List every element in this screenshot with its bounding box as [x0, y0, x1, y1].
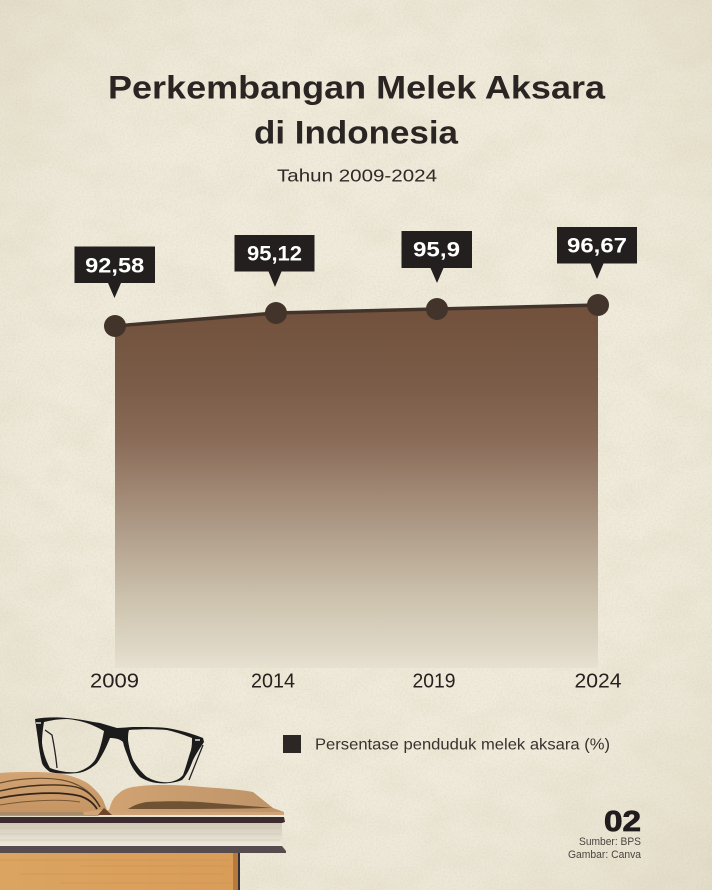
callout: 2024 value: [557, 227, 637, 279]
legend: Persentase penduduk melek aksara (%): [315, 736, 610, 754]
x-axis labels: 2014: [251, 670, 295, 692]
icon: glasses: [35, 717, 204, 783]
title: [108, 70, 605, 150]
open book right leaves: [83, 785, 284, 815]
callout: 2009 value: 92,58: [85, 254, 145, 278]
callout: 2019 value: [402, 231, 472, 283]
page number and credits: Sumber: BPS: [579, 836, 641, 848]
glasses frame: [35, 717, 204, 783]
x-axis labels: 2019: [412, 670, 456, 692]
callout: 2024 value: 96,67: [567, 234, 627, 258]
glasses temples: [45, 730, 203, 780]
callout: 2009 value: [74, 246, 155, 298]
trend line: [115, 305, 598, 326]
area chart: [104, 294, 609, 668]
icon: stack of books: [0, 772, 286, 890]
page number and credits: Gambar: Canva: [568, 849, 642, 861]
title: Perkembangan Melek Aksara: [108, 70, 605, 106]
middle book with cream pages: [0, 817, 286, 853]
open book left leaves: [0, 772, 107, 816]
glasses rivets: [36, 723, 200, 740]
page number and credits: [568, 806, 642, 861]
title: di Indonesia: [254, 114, 458, 150]
callout: 2014 value: 95,12: [247, 242, 302, 266]
callout: 2014 value: [234, 235, 314, 287]
page number and credits: 02: [604, 806, 641, 838]
callout: 2019 value: 95,9: [413, 238, 460, 262]
x-axis labels: 2009: [90, 670, 139, 692]
subtitle: Tahun 2009-2024: [277, 166, 437, 186]
lower book: [0, 852, 240, 890]
x-axis labels: [90, 670, 622, 692]
x-axis labels: 2024: [574, 670, 622, 692]
data points: [104, 294, 609, 337]
chart area fill: [115, 305, 598, 668]
